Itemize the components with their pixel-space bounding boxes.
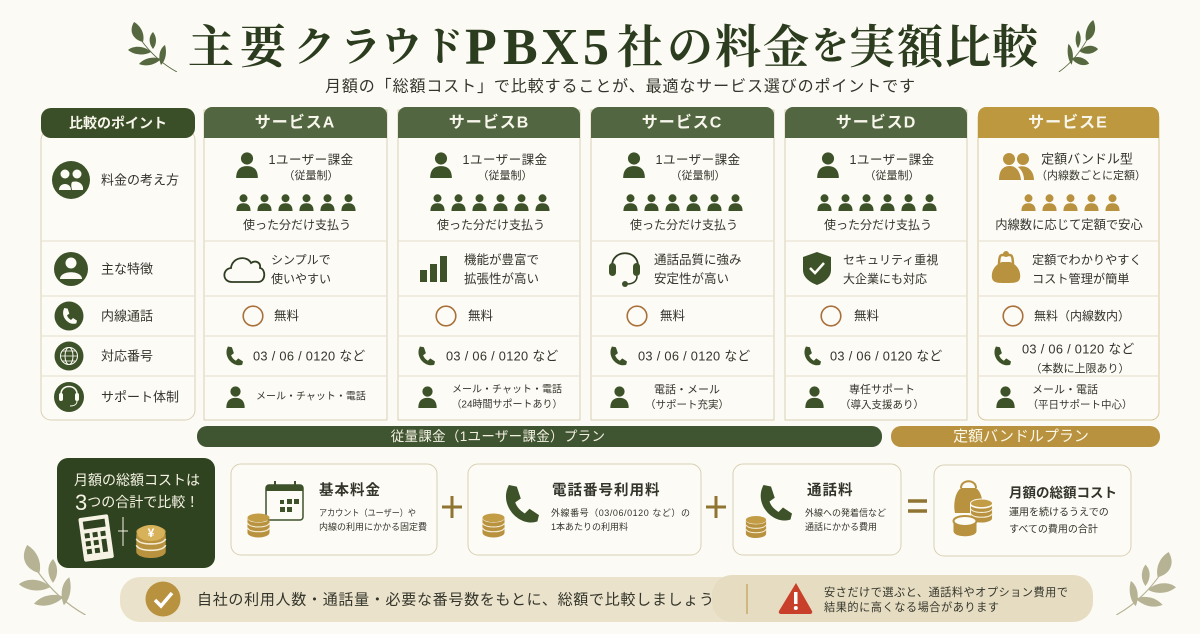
card: base fee (231, 464, 437, 555)
card: call charges: 通話料 (807, 482, 854, 499)
internal calls: 無料 (468, 308, 494, 323)
icon: plus (118, 517, 128, 546)
card: monthly total: 運用を続けるうえでの (1009, 506, 1109, 518)
numbers: 03 / 06 / 0120 など (1022, 342, 1135, 356)
title: 実額比較 (849, 22, 1041, 72)
feature: shield (803, 252, 938, 286)
feature: purse: 定額でわかりやすく (1032, 253, 1142, 267)
row: pricing concept (52, 161, 179, 199)
support: （平日サポート中心） (1028, 398, 1132, 411)
pricing (236, 152, 356, 232)
internal calls (1003, 306, 1130, 326)
internal calls (243, 306, 300, 326)
pricing: 使った分だけ支払う (437, 217, 545, 232)
support: （導入支援あり） (840, 398, 924, 411)
plan bar: bundle: 定額バンドルプラン (953, 428, 1089, 445)
plan bar: per-user (197, 426, 882, 447)
numbers: 03 / 06 / 0120 など (446, 348, 559, 364)
feature: bars: 機能が豊富で (464, 252, 539, 267)
advice bar: 安さだけで選ぶと、通話料やオプション費用で (824, 585, 1068, 599)
pricing: 使った分だけ支払う (243, 217, 351, 232)
numbers (226, 346, 366, 365)
internal calls: 無料（内線数内） (1034, 308, 1130, 323)
icon: yen coins: ¥ (148, 526, 155, 540)
numbers: 03 / 06 / 0120 など (830, 348, 943, 364)
internal calls (627, 306, 686, 326)
numbers: （本数に上限あり） (1030, 361, 1130, 375)
header: サービスA (255, 112, 335, 132)
support (226, 386, 366, 408)
icon: plus 2 (706, 496, 726, 518)
card: call charges: 通話にかかる費用 (805, 521, 877, 532)
card: phone number fee (468, 464, 701, 555)
feature: bars (420, 252, 539, 286)
card: monthly total: すべての費用の合計 (1009, 522, 1098, 536)
title: を (811, 26, 849, 68)
pricing: 1ユーザー課金 (655, 153, 741, 167)
pricing: 定額バンドル型 (1041, 152, 1133, 166)
pricing: （内線数ごとに定額） (1036, 168, 1146, 182)
pricing (995, 152, 1146, 232)
header (785, 107, 967, 138)
card: base fee: アカウント（ユーザー）や (319, 508, 416, 518)
card: monthly total (934, 465, 1131, 556)
card: call charges (733, 464, 901, 555)
pricing (817, 152, 937, 232)
support (805, 383, 924, 411)
feature: bars: 拡張性が高い (464, 271, 539, 286)
feature: purse: コスト管理が簡単 (1032, 271, 1130, 286)
header (398, 107, 580, 138)
support: 専任サポート (849, 383, 915, 396)
internal calls: 無料 (854, 308, 880, 323)
feature: shield: セキュリティ重視 (843, 253, 938, 267)
numbers (418, 346, 559, 365)
internal calls: 無料 (660, 308, 686, 323)
plan bar: per-user: 従量課金（1ユーザー課金）プラン (391, 429, 605, 444)
header (204, 107, 387, 138)
title: 社の料金 (617, 22, 809, 72)
heading: comparison points: 比較のポイント (69, 115, 167, 131)
row: pricing concept: 料金の考え方 (101, 172, 179, 188)
icon: coins (746, 516, 766, 538)
feature: cloud: シンプルで (271, 253, 331, 267)
panel: service B (398, 107, 580, 420)
pricing: （従量制） (670, 169, 726, 182)
icon: plus 1 (442, 496, 462, 518)
support (418, 384, 563, 410)
pricing (623, 152, 743, 232)
header: サービスC (642, 112, 722, 132)
numbers (994, 342, 1135, 375)
header: サービスE (1028, 112, 1108, 132)
feature: headset: 安定性が高い (654, 271, 729, 286)
icon: yen coins (136, 525, 166, 558)
pricing: 内線数に応じて定額で安心 (995, 217, 1143, 232)
row: main features (54, 252, 153, 286)
numbers (610, 346, 751, 365)
pricing: （従量制） (864, 169, 920, 182)
icon: warning (779, 583, 812, 614)
pricing: （従量制） (284, 169, 338, 182)
advice bar: 自社の利用人数・通話量・必要な番号数をもとに、総額で比較しましょう (197, 592, 714, 608)
pricing (430, 152, 550, 232)
header: サービスD (836, 112, 916, 132)
support: メール・電話 (1032, 383, 1098, 396)
icon: calculator (78, 514, 114, 562)
header (591, 107, 774, 138)
heading: comparison points (41, 108, 195, 138)
feature: shield: 大企業にも対応 (843, 272, 927, 286)
card: base fee: 基本料金 (319, 481, 381, 499)
icon: phone (761, 485, 792, 521)
plan bar: bundle (891, 426, 1160, 447)
title: PBX5 (465, 18, 609, 76)
callout: monthly total (57, 458, 215, 568)
callout: monthly total: 月額の総額コストは (74, 472, 200, 488)
card: phone number fee: 外線番号（03/06/0120 など）の (551, 507, 690, 518)
feature: cloud: 使いやすい (271, 271, 331, 286)
numbers: 03 / 06 / 0120 など (638, 348, 751, 364)
support: 電話・メール (654, 383, 720, 396)
card: monthly total: 月額の総額コスト (1009, 484, 1117, 500)
panel: comparison points (41, 108, 195, 420)
pricing: 1ユーザー課金 (462, 153, 548, 167)
card: call charges: 外線への発着信など (805, 507, 886, 518)
support: （サポート充実） (645, 398, 729, 411)
panel: service E (978, 107, 1159, 420)
row: support: サポート体制 (101, 390, 179, 404)
pricing: 使った分だけ支払う (630, 217, 738, 232)
panel: service C (591, 107, 774, 420)
internal calls (436, 306, 494, 326)
panel: service D (785, 107, 967, 420)
icon: purse and coins (954, 481, 993, 536)
support (996, 383, 1132, 411)
internal calls (821, 306, 880, 326)
support: （24時間サポートあり） (451, 398, 563, 410)
icon: check (146, 582, 180, 616)
advice bar (120, 575, 1093, 622)
icon: coins (482, 514, 505, 537)
pricing: （従量制） (478, 169, 532, 182)
title: クラウド (294, 24, 464, 70)
card: phone number fee: 1本あたりの利用料 (551, 521, 628, 532)
row: support (54, 382, 179, 412)
icon: coins (247, 514, 270, 537)
support (610, 383, 729, 411)
pricing: 1ユーザー課金 (849, 153, 935, 167)
header (978, 107, 1159, 138)
callout: monthly total: 3つの合計で比較！ (75, 490, 199, 514)
icon: equals (908, 501, 927, 511)
numbers: 03 / 06 / 0120 など (253, 348, 366, 364)
feature: cloud (224, 253, 331, 286)
icon: sprig top right (1059, 20, 1098, 72)
support: メール・チャット・電話 (452, 384, 562, 396)
icon: calendar (266, 481, 303, 520)
panel: service A (204, 107, 387, 420)
feature: headset: 通話品質に強み (654, 252, 742, 267)
icon: phone (506, 485, 539, 523)
feature: purse (992, 251, 1142, 286)
icon: sprig bottom right (1116, 552, 1176, 615)
subtitle: 月額の「総額コスト」で比較することが、最適なサービス選びのポイントです (325, 78, 915, 96)
icon: sprig bottom left (19, 545, 86, 615)
row: internal calls: 内線通話 (101, 308, 153, 324)
row: numbers (54, 342, 153, 370)
row: main features: 主な特徴 (101, 262, 153, 276)
title: 主要 (188, 22, 288, 72)
row: numbers: 対応番号 (101, 348, 153, 364)
header: サービスB (449, 112, 529, 132)
advice bar: 結果的に高くなる場合があります (824, 600, 999, 614)
card: base fee: 内線の利用にかかる固定費 (319, 521, 427, 532)
numbers (804, 346, 943, 365)
feature: headset (609, 252, 742, 287)
row: internal calls (54, 302, 153, 330)
icon: sprig top left (128, 22, 177, 72)
internal calls: 無料 (274, 308, 300, 323)
support: メール・チャット・電話 (256, 390, 366, 402)
card: phone number fee: 電話番号利用料 (552, 482, 660, 499)
pricing: 1ユーザー課金 (268, 153, 354, 167)
pricing: 使った分だけ支払う (824, 217, 932, 232)
